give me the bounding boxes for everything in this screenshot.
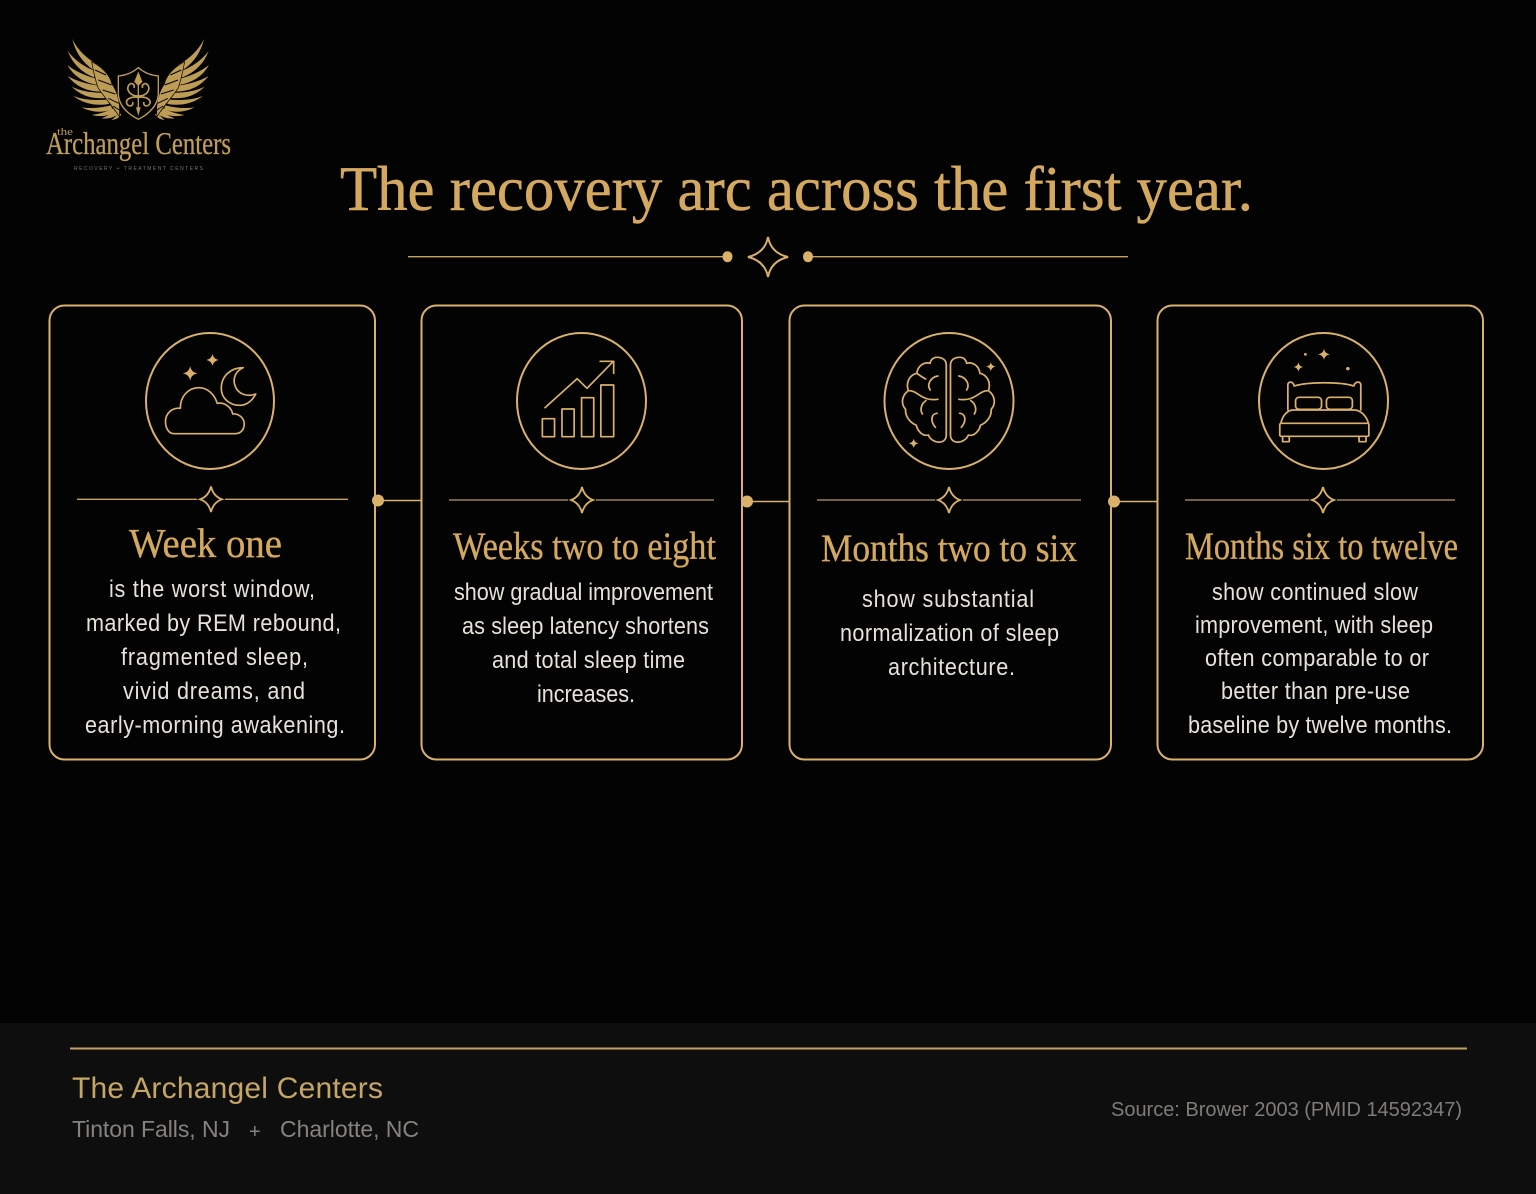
body text: months two to six: show substantial xyxy=(862,585,1034,612)
footer locations: Charlotte, NC xyxy=(280,1116,419,1142)
connector: card 3 to card 4 xyxy=(1108,496,1157,508)
logo tagline: RECOVERY + TREATMENT CENTERS xyxy=(74,166,204,172)
logo: The Archangel Centers xyxy=(46,39,231,172)
logo wordmark: Archangel Centers xyxy=(46,125,231,161)
body text: week one: fragmented sleep, xyxy=(121,643,308,670)
body text: months two to six: architecture. xyxy=(888,653,1015,680)
heading: weeks two to eight: Weeks two to eight xyxy=(453,525,716,568)
heading: week one: Week one xyxy=(129,520,282,566)
icon: bed with stars xyxy=(1259,333,1388,469)
footer brand name: The Archangel Centers xyxy=(72,1072,383,1105)
heading: months two to six: Months two to six xyxy=(821,527,1077,570)
body text: week one xyxy=(85,575,345,738)
body text: week one: is the worst window, xyxy=(109,575,315,602)
footer locations: Tinton Falls, NJ xyxy=(72,1116,230,1142)
footer locations: + xyxy=(249,1121,261,1143)
body text: months six to twelve: often comparable to or xyxy=(1205,644,1429,671)
panel: weeks two to eight xyxy=(422,306,742,760)
body text: months six to twelve: better than pre-use xyxy=(1221,677,1410,704)
body text: weeks two to eight: and total sleep time xyxy=(492,646,685,673)
body text: week one: marked by REM rebound, xyxy=(86,609,341,636)
card outline xyxy=(1158,306,1483,760)
card outline xyxy=(790,306,1111,760)
body text: week one: vivid dreams, and xyxy=(123,677,305,704)
divider with star xyxy=(1185,487,1455,513)
title divider ornament xyxy=(408,237,1128,277)
body text: months six to twelve xyxy=(1188,578,1452,738)
title: The recovery arc across the first year. xyxy=(340,154,1253,224)
body text: months two to six xyxy=(840,585,1059,680)
footer xyxy=(0,1023,1536,1194)
panel: months six to twelve xyxy=(1158,306,1483,760)
card outline xyxy=(50,306,375,760)
body text: week one: early-morning awakening. xyxy=(85,711,345,738)
body text: months two to six: normalization of sleep xyxy=(840,619,1059,646)
logo word small: the: the xyxy=(57,127,74,138)
divider with star xyxy=(77,486,348,512)
body text: months six to twelve: improvement, with sleep xyxy=(1195,611,1433,638)
logo emblem: wings and shield xyxy=(67,39,209,120)
icon: rising bar chart xyxy=(517,333,646,469)
body text: months six to twelve: baseline by twelve months. xyxy=(1188,711,1452,738)
source citation: Source: Brower 2003 (PMID 14592347) xyxy=(1111,1099,1462,1121)
body text: weeks two to eight: as sleep latency shortens xyxy=(462,612,709,639)
connector: card 2 to card 3 xyxy=(741,496,789,508)
divider with star xyxy=(449,487,714,513)
body text: weeks two to eight xyxy=(454,578,714,707)
body text: months six to twelve: show continued slow xyxy=(1212,578,1418,605)
body text: weeks two to eight: increases. xyxy=(537,680,635,707)
divider with star xyxy=(817,487,1081,513)
icon: cloud and moon xyxy=(146,333,274,469)
panel: months two to six xyxy=(790,306,1111,760)
body text: weeks two to eight: show gradual improvement xyxy=(454,578,714,605)
footer locations xyxy=(72,1116,419,1143)
panel: week one xyxy=(50,306,375,760)
connector: card 1 to card 2 xyxy=(372,494,421,506)
icon: brain xyxy=(884,333,1014,469)
card outline xyxy=(422,306,742,760)
heading: months six to twelve: Months six to twelve xyxy=(1185,525,1458,568)
